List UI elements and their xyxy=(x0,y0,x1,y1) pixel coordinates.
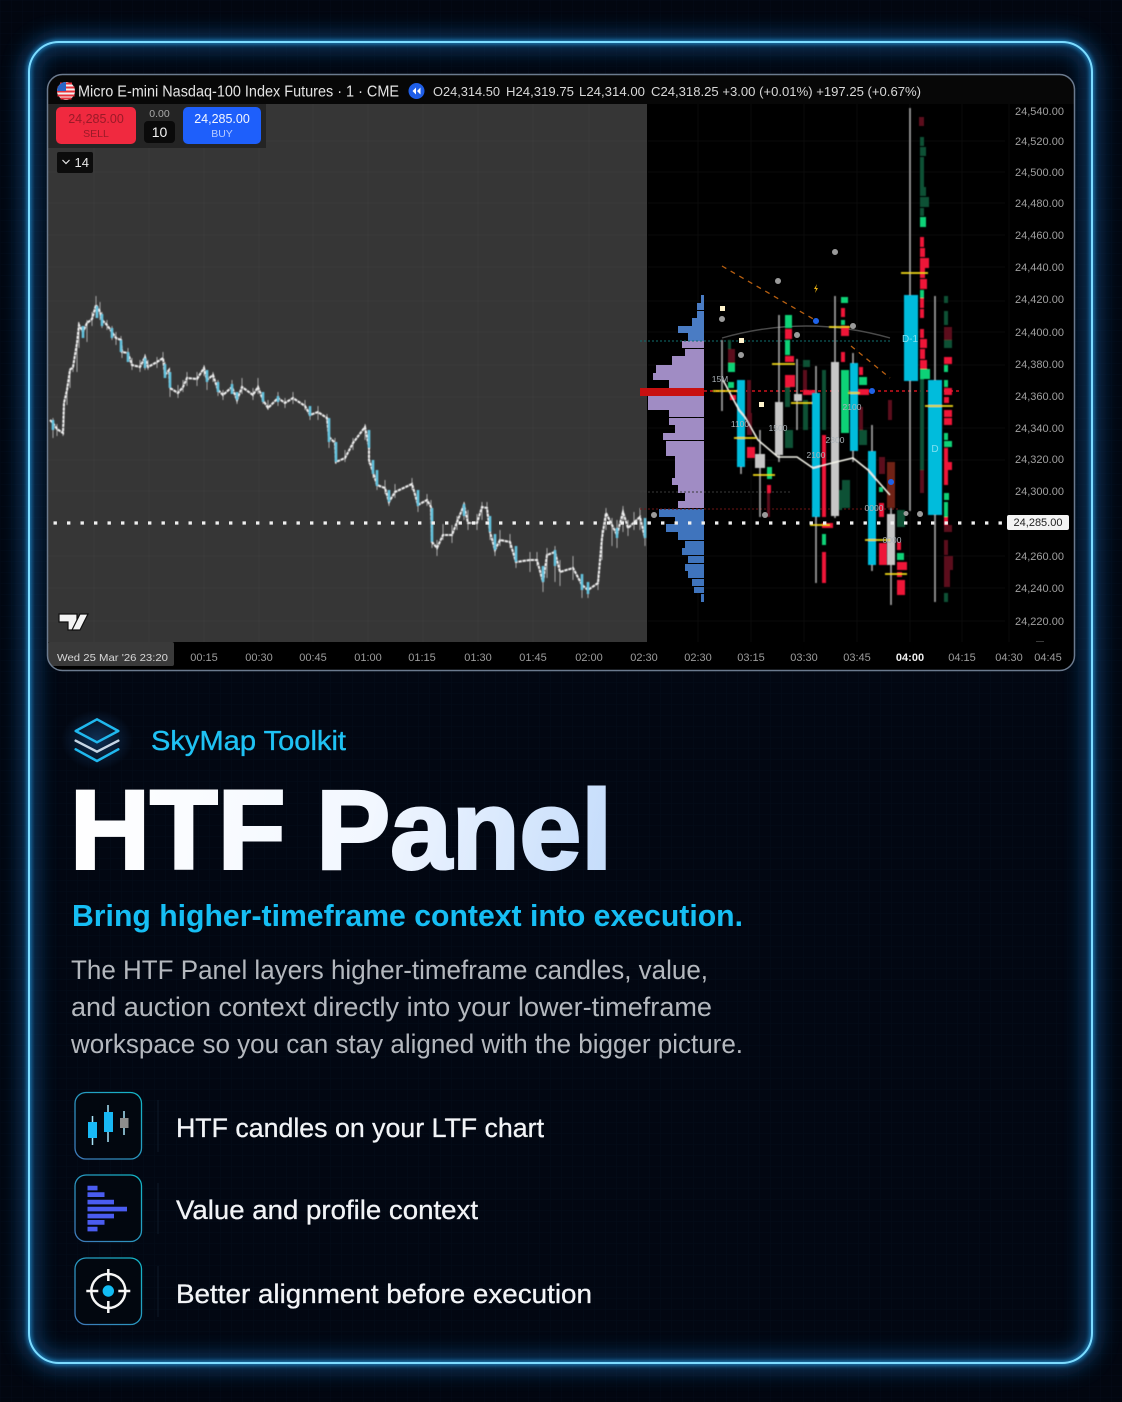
price axis: 24,540.00 xyxy=(1015,106,1064,118)
reference levels xyxy=(640,266,960,509)
time axis: 00:30 xyxy=(245,652,273,664)
description: workspace so you can stay aligned with the bigger picture. xyxy=(70,1029,743,1059)
chart screenshot panel xyxy=(47,74,1075,671)
dim candle labels: 2300 xyxy=(826,435,845,445)
brand row xyxy=(61,710,346,770)
time axis: 04:00 xyxy=(896,652,924,664)
icon: chart watermark xyxy=(59,614,88,630)
OHLC values: C24,318.25 +3.00 (+0.01%) +197.25 (+0.67%) xyxy=(651,85,921,99)
brown session box xyxy=(887,462,895,508)
price axis: 24,400.00 xyxy=(1015,327,1064,339)
left history pane xyxy=(48,104,647,643)
price axis: 24,460.00 xyxy=(1015,230,1064,242)
feature: value and profile xyxy=(75,1175,479,1242)
price axis: 24,240.00 xyxy=(1015,583,1064,595)
time axis: 04:30 xyxy=(995,652,1023,664)
price axis xyxy=(1015,106,1064,642)
indicator count chip: 14 xyxy=(74,155,89,170)
feature: better alignment xyxy=(75,1258,592,1324)
time axis: 03:15 xyxy=(737,652,765,664)
sell button: 24,285.00 xyxy=(68,112,124,126)
midline path xyxy=(723,380,890,495)
dim candle labels: 2100 xyxy=(843,402,862,412)
description: The HTF Panel layers higher-timeframe candles, value, xyxy=(71,955,708,985)
icon: US flag xyxy=(57,82,75,100)
quantity: 10 xyxy=(152,124,167,140)
brand name: SkyMap Toolkit xyxy=(151,725,346,756)
gray dots xyxy=(651,249,923,518)
time axis: 03:30 xyxy=(790,652,818,664)
time axis: 01:30 xyxy=(464,652,492,664)
current price dotted line xyxy=(54,521,1006,525)
time axis xyxy=(48,642,1062,666)
OHLC values: O24,314.50 xyxy=(433,85,500,99)
time axis: 02:30 xyxy=(684,652,712,664)
right pane grid xyxy=(648,104,1009,643)
dim candle labels: 0000 xyxy=(883,535,902,545)
order panel xyxy=(48,104,266,148)
time axis: 02:00 xyxy=(575,652,603,664)
time axis: 00:45 xyxy=(299,652,327,664)
white candle bodies xyxy=(50,305,645,590)
dim candle labels: 15M xyxy=(712,374,728,384)
current price tag xyxy=(1007,515,1069,530)
subtitle: Bring higher-timeframe context into execution. xyxy=(72,898,743,933)
dark green footprints xyxy=(728,137,952,602)
blue dots xyxy=(813,318,894,485)
footprint columns xyxy=(728,117,953,602)
indicator count chip xyxy=(57,152,93,173)
dim candle labels: 1100 xyxy=(731,419,749,429)
price axis: 24,360.00 xyxy=(1015,391,1064,403)
price axis: 24,340.00 xyxy=(1015,423,1064,435)
yellow ticks xyxy=(713,273,953,574)
gray candle bodies xyxy=(755,362,895,565)
description: and auction context directly into your lower-timeframe xyxy=(71,992,712,1022)
time axis: 04:45 xyxy=(1034,652,1062,664)
cream markers xyxy=(720,306,764,407)
icon: replay xyxy=(408,83,424,99)
feature: better alignment: Better alignment before execution xyxy=(176,1279,592,1309)
price axis: 24,320.00 xyxy=(1015,454,1064,466)
point of control xyxy=(640,388,704,396)
blue down candles xyxy=(53,306,645,594)
sell button: SELL xyxy=(83,128,109,140)
time axis: 00:15 xyxy=(190,652,218,664)
lightning marker xyxy=(814,284,818,293)
date label xyxy=(48,642,174,666)
signal markers xyxy=(651,249,923,518)
feature: HTF candles: HTF candles on your LTF chart xyxy=(176,1113,544,1143)
price line chart xyxy=(50,296,645,598)
volume profile xyxy=(640,295,704,602)
time axis: 03:45 xyxy=(843,652,871,664)
HTF candles xyxy=(713,108,953,605)
price axis: 24,260.00 xyxy=(1015,551,1064,563)
time axis: 01:45 xyxy=(519,652,547,664)
time axis: 04:15 xyxy=(948,652,976,664)
description xyxy=(70,955,743,1059)
dim candle labels: D xyxy=(931,444,939,455)
quantity: 0.00 xyxy=(149,108,170,120)
quantity xyxy=(144,108,175,143)
feature: value and profile: Value and profile context xyxy=(176,1195,479,1225)
dim candle labels: D-1 xyxy=(902,334,918,345)
price axis: 24,300.00 xyxy=(1015,486,1064,498)
buy button: BUY xyxy=(211,128,233,140)
feature list xyxy=(75,1092,592,1324)
price axis: 24,420.00 xyxy=(1015,294,1064,306)
purple value area xyxy=(648,341,704,508)
blue lower profile xyxy=(659,509,704,602)
OHLC values: L24,314.00 xyxy=(579,85,645,99)
buy button xyxy=(183,107,261,144)
OHLC values xyxy=(433,85,921,99)
dim candle labels: 0000 xyxy=(865,503,884,513)
icon: layered stack xyxy=(61,710,133,770)
dark red footprints xyxy=(728,117,953,587)
instrument title: Micro E-mini Nasdaq-100 Index Futures · 1 · CME xyxy=(78,84,399,100)
buy button: 24,285.00 xyxy=(194,112,250,126)
time axis: 01:00 xyxy=(354,652,382,664)
dim candle labels: 2100 xyxy=(807,450,826,460)
candle wicks xyxy=(722,108,935,605)
sell button xyxy=(56,107,136,144)
OHLC values: H24,319.75 xyxy=(506,85,574,99)
chart header bar xyxy=(57,82,920,100)
wicks xyxy=(53,296,645,598)
bright green footprints xyxy=(728,217,952,560)
dim candle labels: 1500 xyxy=(769,423,788,433)
price axis: 24,480.00 xyxy=(1015,198,1064,210)
title: HTF Panel xyxy=(70,768,612,892)
current price tag: 24,285.00 xyxy=(1014,517,1062,529)
time axis: 01:15 xyxy=(408,652,436,664)
price axis: 24,500.00 xyxy=(1015,167,1064,179)
dim candle labels xyxy=(712,334,939,545)
time axis: 02:30 xyxy=(630,652,658,664)
feature: HTF candles xyxy=(75,1092,544,1159)
price axis: 24,220.00 xyxy=(1015,616,1064,628)
bright red footprints xyxy=(730,237,952,595)
price axis: 24,440.00 xyxy=(1015,262,1064,274)
cyan candle bodies xyxy=(737,295,942,565)
price axis: 24,380.00 xyxy=(1015,359,1064,371)
price axis: 24,520.00 xyxy=(1015,136,1064,148)
blue upper profile xyxy=(678,295,704,341)
date label: Wed 25 Mar '26 23:20 xyxy=(57,652,168,664)
